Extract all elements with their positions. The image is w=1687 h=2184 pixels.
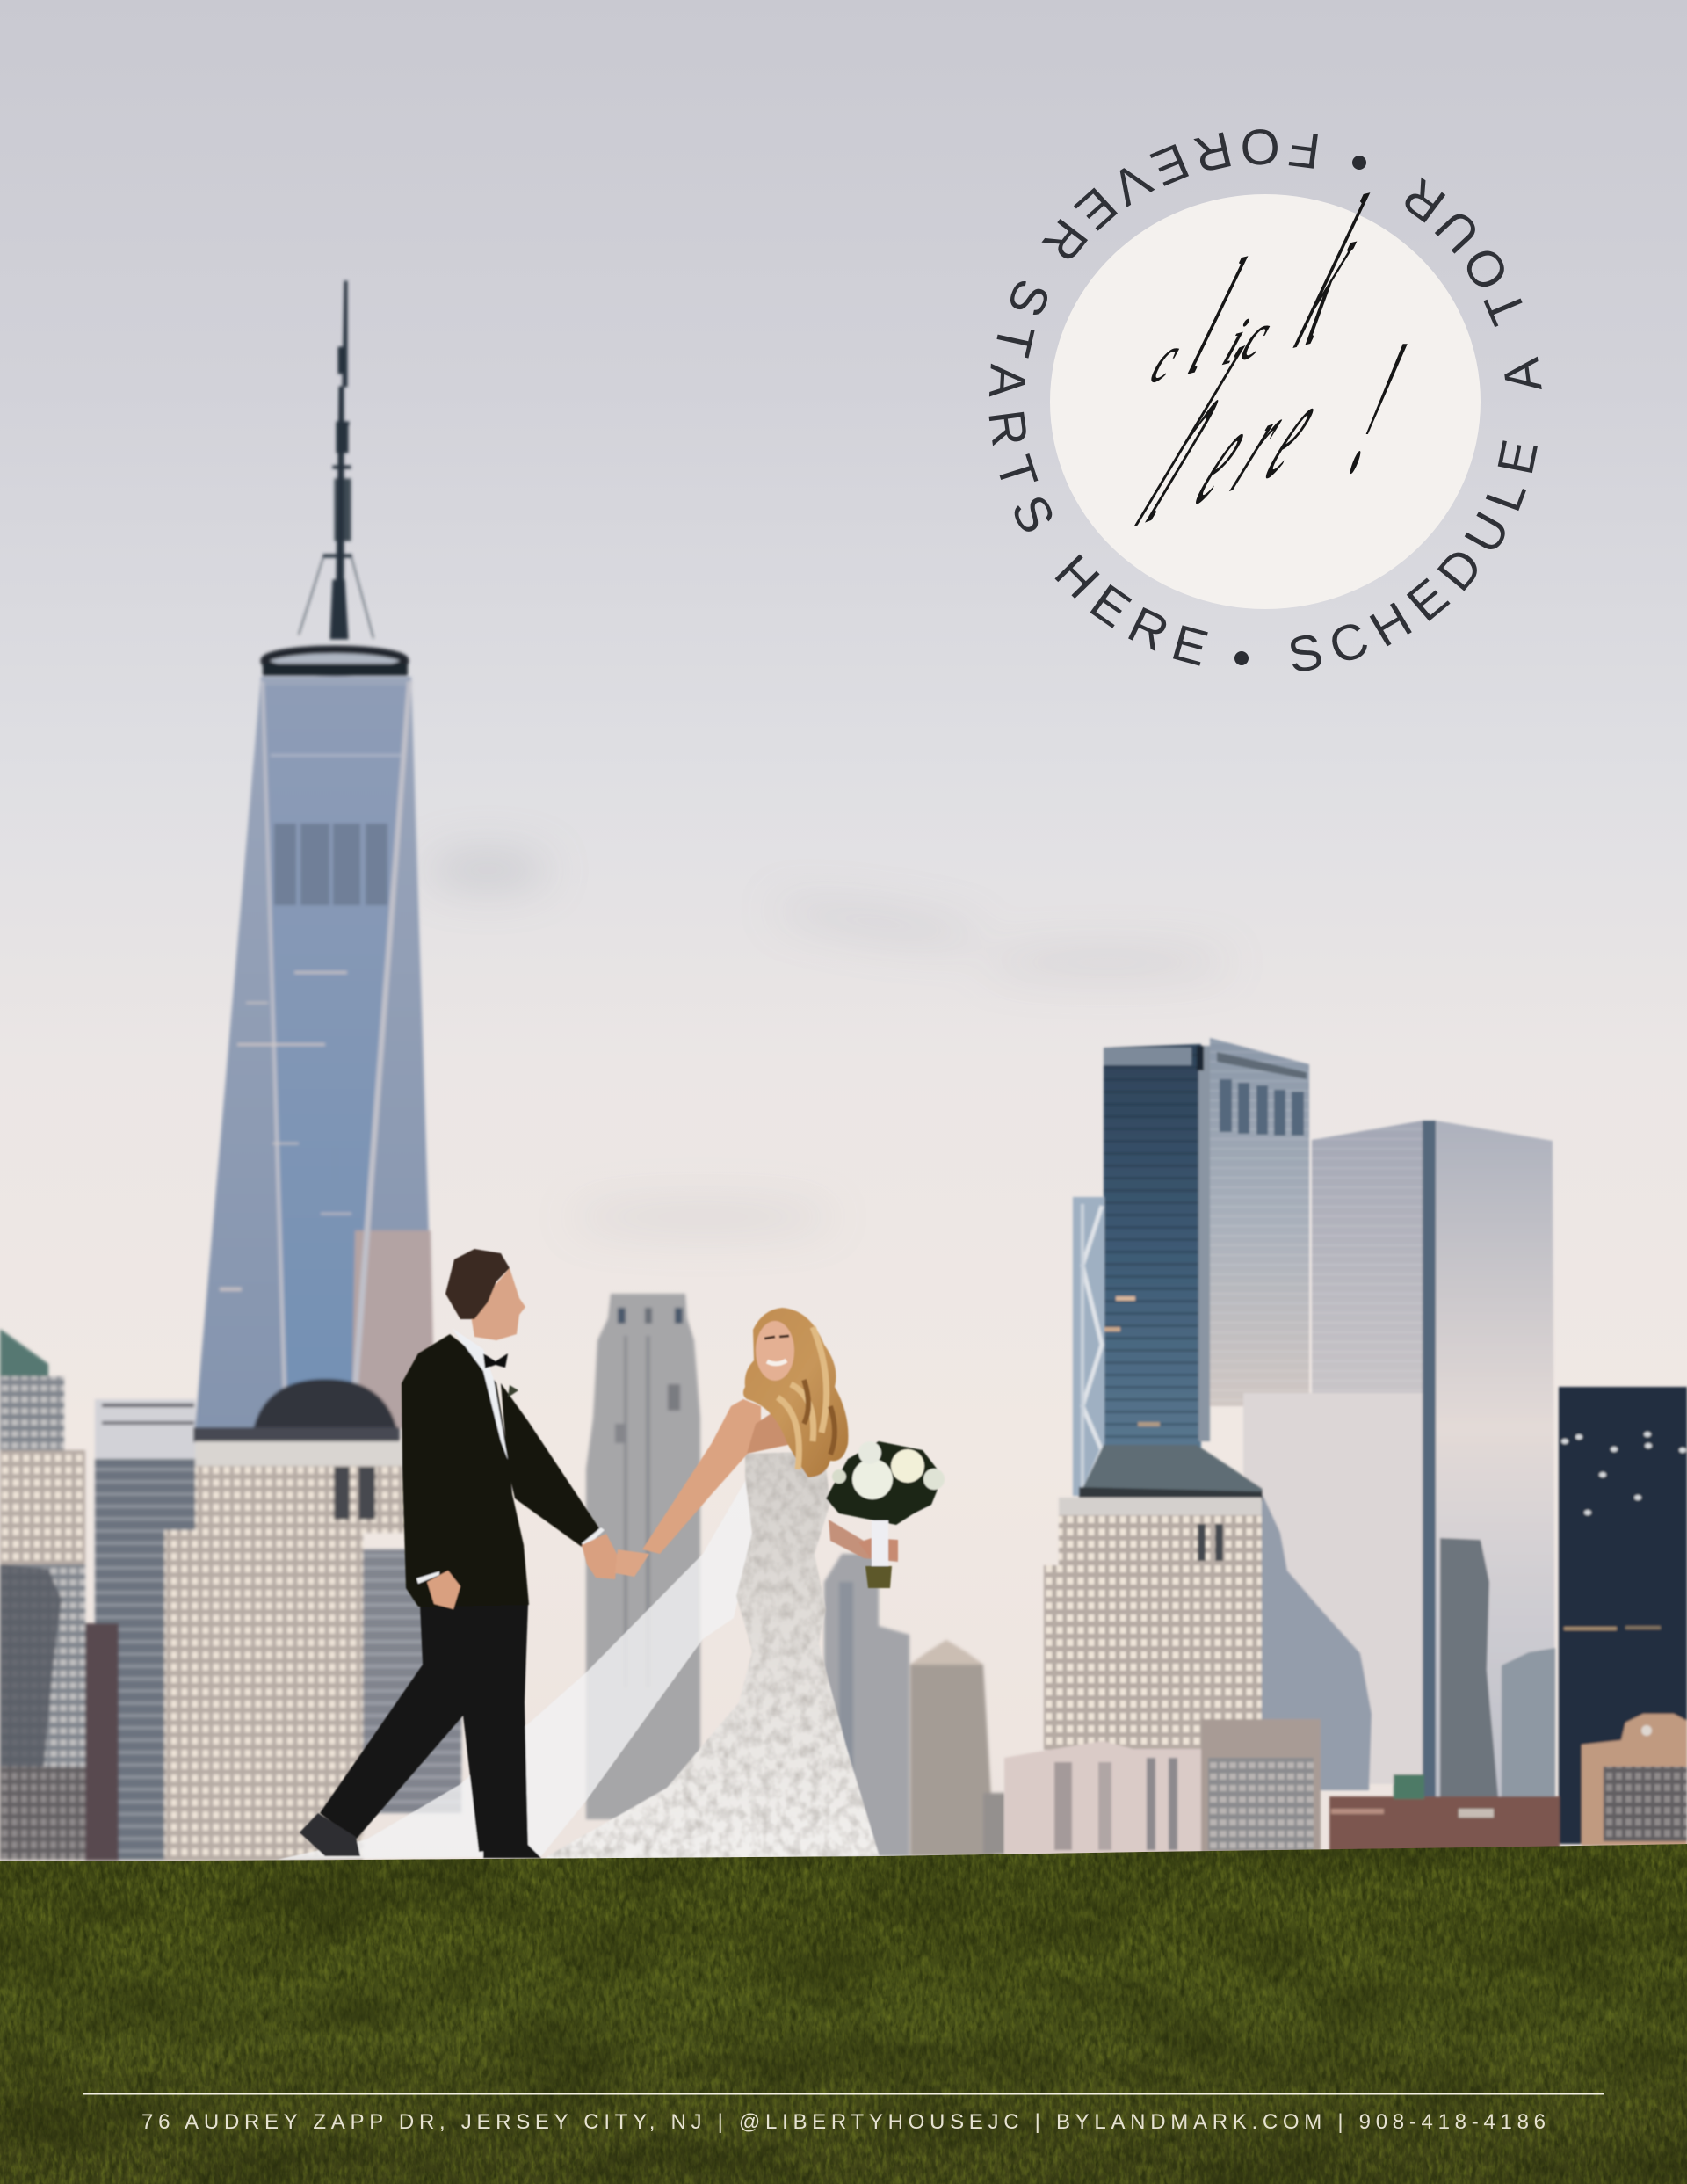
bride hair — [743, 1308, 848, 1477]
antenna spire — [299, 281, 373, 639]
script: click — [1126, 150, 1397, 432]
groom trousers — [320, 1605, 528, 1852]
script: here: ere — [1174, 342, 1370, 534]
sky clouds — [426, 851, 1230, 1233]
bride arm — [642, 1399, 761, 1554]
footer contact line: 76 AUDREY ZAPP DR, JERSEY CITY, NJ | @LIBERTYHOUSEJC | BYLANDMARK.COM | 908-418-4186 — [141, 2110, 1546, 2134]
building: One World Trade Center — [195, 281, 435, 1428]
circular text: schedule a tour / forever starts here: A — [1504, 357, 1542, 390]
groom hands — [582, 1534, 618, 1579]
bride dress — [541, 1451, 880, 1860]
bridal veil — [277, 1477, 752, 1860]
buildings: behind bride — [824, 1554, 1005, 1856]
circular text: schedule a tour / forever starts here: TOUR — [1406, 178, 1523, 327]
ring bullet dots — [1352, 156, 1366, 170]
building: stepped cream tower — [1044, 1445, 1263, 1750]
building: stepped blue silhouette — [1258, 1485, 1372, 1790]
groom shirt — [452, 1328, 508, 1460]
script: click: k — [1271, 150, 1397, 395]
building: right glass tower — [1312, 1121, 1555, 1802]
script: here — [1102, 242, 1427, 581]
building: black tower — [1559, 1387, 1687, 1844]
groom shoes — [300, 1813, 360, 1856]
building: left tall tower — [0, 1329, 119, 1861]
couple walking hand in hand — [277, 1249, 945, 1860]
building: dome tower — [164, 1379, 461, 1861]
script: here: h — [1102, 294, 1283, 581]
script: click: l — [1169, 225, 1263, 410]
observation deck ring — [264, 649, 405, 672]
grass lawn — [0, 1844, 1687, 2184]
circular text: schedule a tour / forever starts here: HERE — [1054, 554, 1208, 666]
groom head — [470, 1268, 525, 1340]
skyline: left buildings — [0, 281, 1005, 1861]
circular text: schedule a tour / forever starts here: FOREVER — [1042, 129, 1318, 258]
circular text: schedule a tour / forever starts here — [989, 129, 1542, 671]
building: dark striped tower — [95, 1399, 196, 1860]
buildings: tan and brick low rise — [1004, 1714, 1687, 1854]
groom jacket — [402, 1334, 529, 1607]
building: art deco tower — [586, 1294, 700, 1819]
script: click: ic — [1213, 295, 1290, 380]
building: lower glass block — [1243, 1393, 1423, 1784]
lattice bracing — [1073, 1197, 1104, 1496]
footer rule — [83, 2093, 1604, 2095]
bouquet — [826, 1441, 945, 1588]
tour call-to-action badge — [989, 129, 1542, 671]
badge disc — [1050, 194, 1481, 609]
skyline: right buildings — [1004, 1038, 1687, 1854]
script: click: c — [1141, 319, 1192, 398]
circular text: schedule a tour / forever starts here: STARTS — [989, 281, 1053, 532]
circular text: schedule a tour / forever starts here: SCHEDULE — [1291, 440, 1538, 671]
bride face — [756, 1321, 794, 1381]
script: exclamation mark: ! — [1330, 299, 1427, 513]
building: blue tower — [1073, 1038, 1309, 1496]
